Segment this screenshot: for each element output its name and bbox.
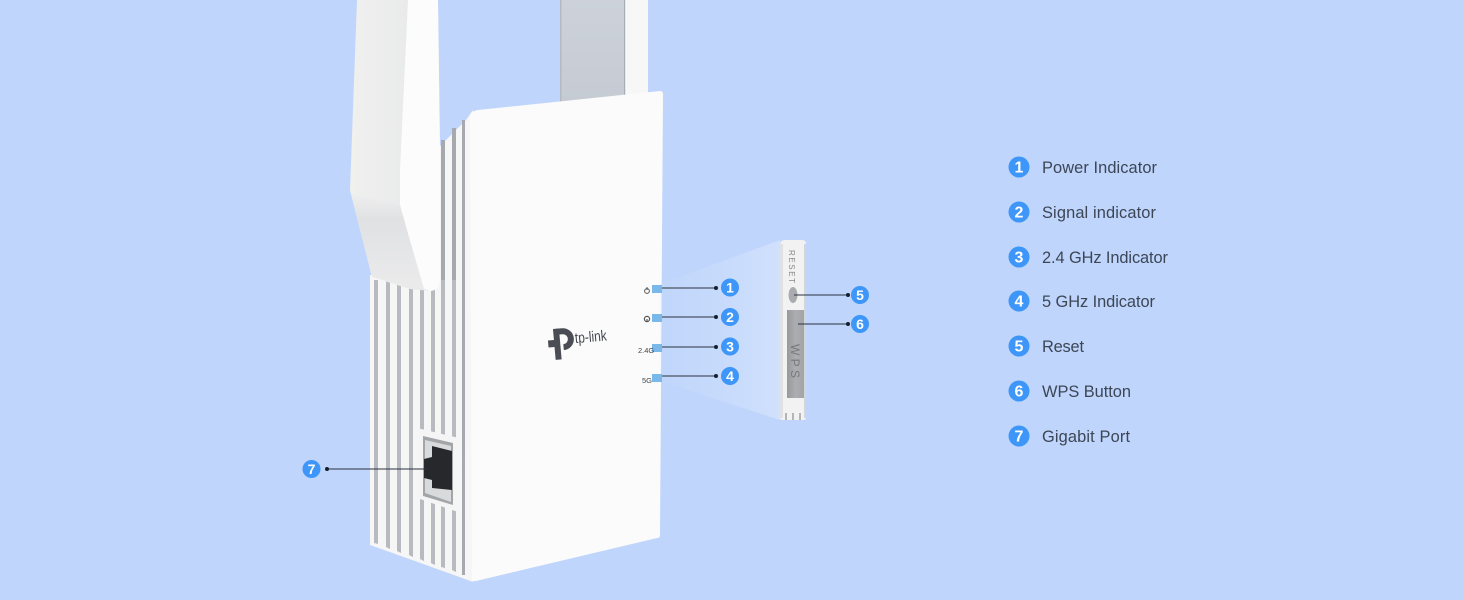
callout badge 7: 7 (308, 461, 316, 477)
legend item 5 (1008, 336, 1084, 356)
legend item 7: Gigabit Port (1042, 428, 1130, 446)
callout badge 5 (851, 286, 869, 304)
callout badge 4: 4 (726, 368, 734, 384)
legend item 7 (1008, 426, 1130, 446)
icon: signal (644, 316, 650, 322)
legend item 6: 6 (1015, 384, 1024, 400)
callout badge 7 (302, 460, 320, 478)
device side with cooling fins (370, 110, 473, 582)
WPS button (787, 310, 804, 398)
LED 1 (652, 285, 662, 293)
legend item 4: 4 (1015, 294, 1024, 310)
callout badge 2 (721, 308, 739, 326)
LED 2 (652, 314, 662, 322)
legend item 1: Power Indicator (1042, 159, 1158, 177)
legend item 1 (1008, 156, 1158, 178)
reset button (788, 287, 798, 303)
tp-link logo (547, 324, 609, 360)
callout badge 1: 1 (726, 280, 734, 296)
callout badge 3: 3 (726, 338, 734, 354)
legend item 4 (1008, 290, 1156, 312)
foot notches (786, 413, 800, 420)
right antenna (560, 0, 648, 102)
legend item 6 (1008, 380, 1131, 402)
legend item 2 (1008, 202, 1157, 222)
callout badge 1 (721, 278, 739, 296)
light beam to side view (660, 240, 780, 420)
Ethernet port (417, 428, 459, 512)
legend item 2: 2 (1015, 204, 1024, 222)
legend item 3: 3 (1015, 250, 1024, 266)
label: 2.4G: 2.4G (638, 346, 654, 355)
legend item 2: Signal indicator (1042, 204, 1157, 222)
legend item 5: Reset (1042, 338, 1084, 356)
tp-link logo: tp-link (574, 327, 608, 346)
callout badge 5: 5 (856, 287, 864, 303)
label: WPS: WPS (788, 344, 802, 378)
leader lines (325, 286, 850, 471)
legend item 5: 5 (1015, 338, 1024, 356)
legend item 6: WPS Button (1042, 383, 1131, 401)
callout badge 3 (721, 338, 739, 356)
device front face (470, 91, 663, 581)
legend item 4: 5 GHz Indicator (1042, 293, 1156, 311)
LED 3 (652, 344, 662, 352)
label: reset: RESET (787, 250, 796, 283)
legend item 1: 1 (1015, 160, 1024, 176)
callout badge 6 (851, 315, 869, 333)
callout badge 2: 2 (726, 309, 734, 325)
legend item 3: 2.4 GHz Indicator (1042, 249, 1169, 267)
legend item 7: 7 (1015, 428, 1024, 446)
side view panel (780, 240, 806, 420)
callout badge 4 (721, 367, 739, 385)
indicator LEDs and labels (638, 285, 662, 385)
callout badge 6: 6 (856, 316, 864, 332)
LED 4 (652, 374, 662, 382)
icon: power (645, 287, 649, 293)
label: 5G: 5G (642, 376, 652, 385)
legend (1008, 156, 1169, 446)
legend item 3 (1008, 246, 1169, 268)
left antenna (350, 0, 440, 291)
